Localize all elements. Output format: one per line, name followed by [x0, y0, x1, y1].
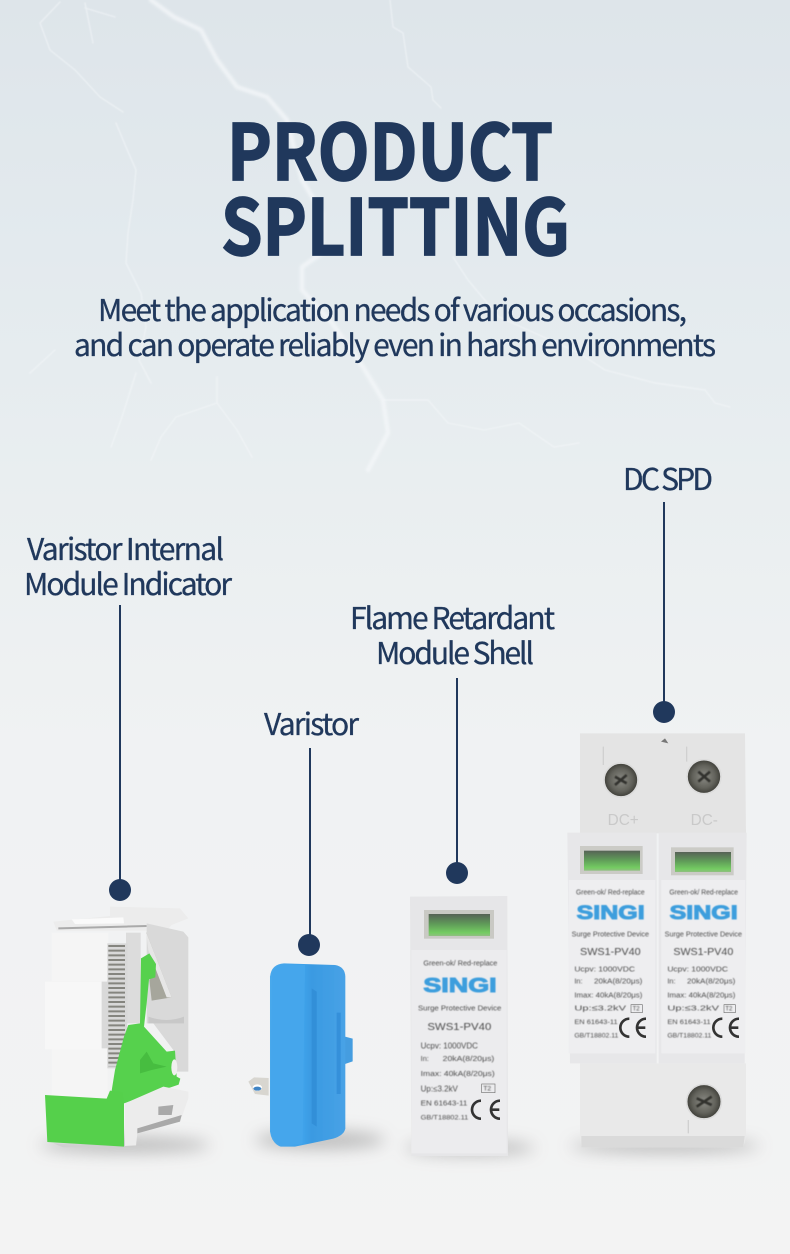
label: flame retardant module shell	[350, 594, 555, 673]
label text: Up:≤3.2kV	[421, 1084, 459, 1093]
module left: SWS1-PV40	[580, 947, 641, 958]
pivot	[171, 1059, 177, 1075]
label: varistor internal module indicator: Varistor Internal	[27, 525, 224, 569]
label text: SWS1-PV40	[427, 1022, 492, 1033]
label text: Ucpv: 1000VDC	[421, 1041, 478, 1050]
module left: Imax: 40kA(8/20μs)	[574, 990, 642, 999]
product: module shell	[410, 896, 508, 1156]
leader line: varistor	[298, 748, 320, 956]
module left: Surge Protective Device	[572, 932, 649, 939]
label text: EN 61643-11	[421, 1098, 467, 1107]
label text: 20kA(8/20μs)	[443, 1054, 494, 1063]
module right: Green-ok/ Red-replace	[669, 888, 738, 897]
product: blue varistor	[248, 963, 353, 1147]
metal terminal	[248, 1077, 269, 1096]
module right: Imax: 40kA(8/20μs)	[667, 990, 735, 999]
base body	[580, 733, 746, 833]
leader line: dc spd	[653, 502, 675, 723]
grey strip	[126, 933, 141, 1023]
shell body	[410, 896, 508, 1156]
top metal plate	[53, 907, 188, 931]
label: flame retardant module shell: Module Shell	[376, 629, 534, 673]
module right: Surge Protective Device	[665, 932, 742, 939]
module left: Green-ok/ Red-replace	[576, 888, 645, 897]
label text: Surge Protective Device	[418, 1004, 501, 1013]
label: varistor: Varistor	[264, 700, 359, 744]
label text: SINGI	[423, 975, 497, 997]
module left: 20kA(8/20μs)	[594, 977, 642, 986]
CE mark	[472, 1101, 500, 1119]
label text: Green-ok/ Red-replace	[423, 958, 497, 967]
body	[270, 963, 345, 1147]
label: varistor internal module indicator: Module Indicator	[24, 560, 232, 604]
module right: SWS1-PV40	[673, 947, 734, 958]
module right: In:	[667, 977, 675, 986]
grey housing	[147, 923, 188, 1072]
label text: In:	[421, 1054, 429, 1063]
leader line: shell	[446, 678, 468, 884]
module left: GB/T18802.11	[574, 1033, 619, 1039]
label: varistor internal module indicator	[24, 525, 232, 604]
module left: Ucpv: 1000VDC	[574, 964, 636, 973]
title: PRODUCT	[227, 92, 553, 203]
subtitle	[74, 286, 716, 365]
dc markings: DC+	[608, 812, 639, 829]
module left: EN 61643-11	[574, 1019, 618, 1026]
indicator window	[424, 910, 494, 939]
subtitle: Meet the application needs of various occasions,	[98, 286, 687, 330]
screw recess lines	[603, 747, 688, 1133]
product: dc spd	[567, 733, 747, 1147]
module right: T2	[725, 1007, 733, 1013]
label: dc spd: DC SPD	[623, 455, 713, 499]
subtitle: and can operate reliably even in harsh environments	[74, 321, 716, 365]
module right	[659, 833, 747, 1063]
metal contact	[146, 932, 172, 1001]
screws	[604, 760, 721, 1119]
side tab	[345, 1037, 353, 1064]
title	[221, 92, 570, 278]
module left: Up:≤3.2kV	[574, 1004, 627, 1013]
background lightning	[30, 0, 730, 470]
module right: Up:≤3.2kV	[667, 1004, 720, 1013]
module right: EN 61643-11	[667, 1019, 711, 1026]
white blocks	[52, 933, 108, 981]
module right: 20kA(8/20μs)	[687, 977, 735, 986]
leader line: indicator	[109, 605, 131, 901]
module left	[567, 833, 657, 1063]
label text: T2	[483, 1086, 491, 1093]
module left: T2	[633, 1007, 640, 1013]
title: SPLITTING	[221, 167, 570, 278]
green lever	[112, 953, 180, 1103]
label text: Imax: 40kA(8/20μs)	[421, 1069, 495, 1078]
module left: SINGI	[577, 903, 645, 924]
product shadows	[40, 1131, 760, 1155]
label text	[418, 958, 501, 1122]
module right: Ucpv: 1000VDC	[667, 964, 729, 973]
lower housing	[125, 1087, 188, 1146]
module left: In:	[574, 977, 582, 986]
module right: GB/T18802.11	[667, 1033, 712, 1039]
label text: GB/T18802.11	[421, 1115, 469, 1122]
spring	[107, 943, 127, 1068]
product: dc spd: DC-	[691, 812, 718, 829]
product: varistor internal module	[45, 907, 188, 1147]
module right: SINGI	[670, 903, 738, 924]
label: flame retardant module shell: Flame Retardant	[350, 594, 555, 638]
green base	[45, 1091, 124, 1147]
